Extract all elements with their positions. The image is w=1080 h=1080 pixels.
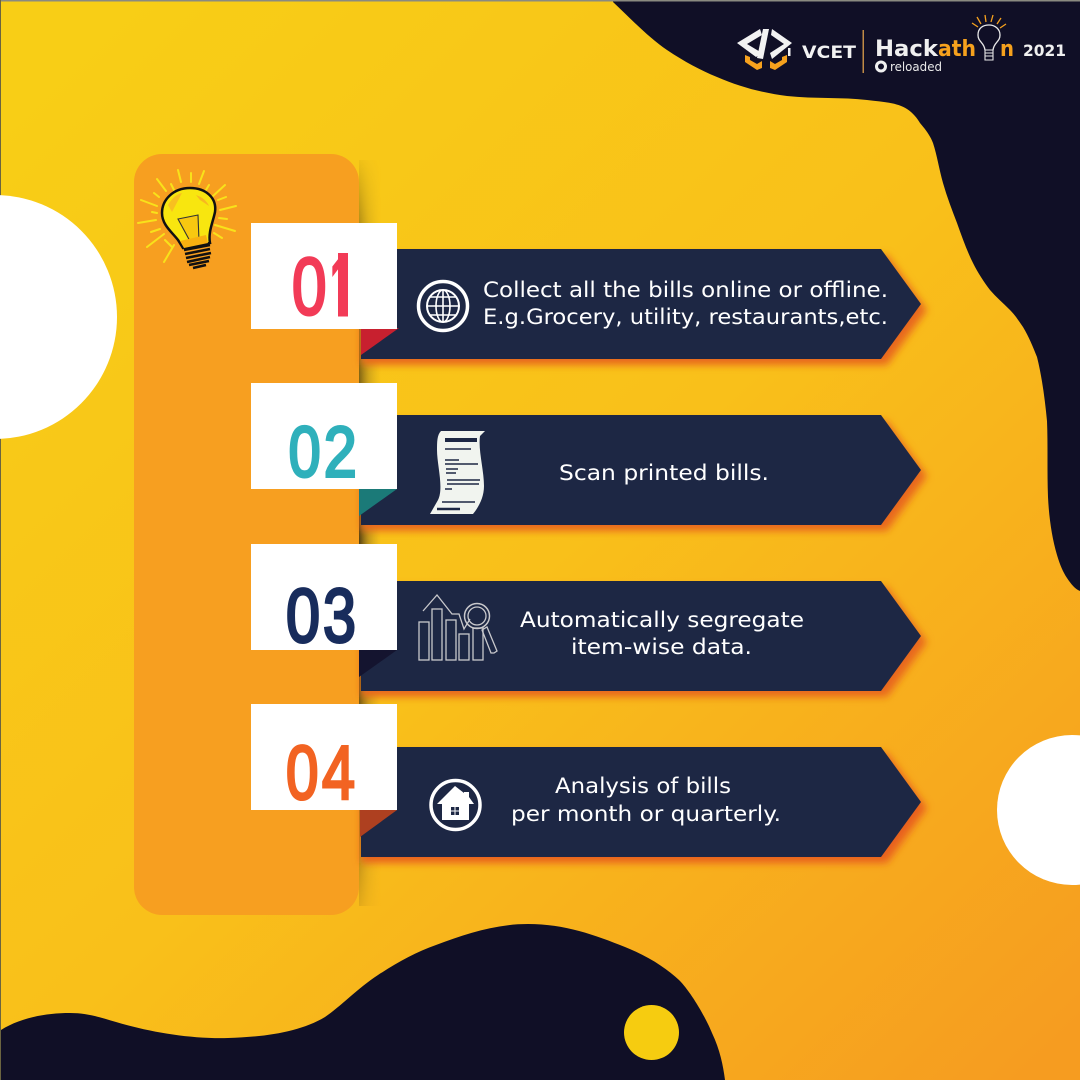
number: 0 xyxy=(292,242,326,332)
header logos xyxy=(737,15,1066,74)
arrow shadow xyxy=(361,255,927,365)
arrow shadow xyxy=(361,421,927,531)
icon: receipt xyxy=(430,431,485,514)
number card xyxy=(251,544,397,650)
description: per month or quarterly. xyxy=(511,802,781,827)
arrow banner xyxy=(361,747,921,857)
step 03 xyxy=(251,544,927,697)
fold triangle xyxy=(359,650,397,677)
description: E.g.Grocery, utility, restaurants,etc. xyxy=(483,305,888,330)
yellow circle xyxy=(624,1005,679,1060)
icon: hackathon bulb xyxy=(972,15,1006,60)
step 04 xyxy=(251,704,927,863)
number: 3 xyxy=(323,574,356,659)
reloaded wordmark: reloaded xyxy=(890,60,942,74)
icon: VCET cap logo xyxy=(737,29,792,70)
step 02 xyxy=(251,383,927,531)
arrow shadow xyxy=(361,753,927,863)
header logos: ath xyxy=(938,37,976,62)
description: Scan printed bills. xyxy=(559,461,769,486)
number: 1 xyxy=(329,242,353,332)
icon: reloaded xyxy=(876,62,886,71)
left white circle xyxy=(0,195,117,439)
fold triangle xyxy=(361,328,399,355)
arrow banner xyxy=(361,249,921,359)
description xyxy=(483,278,888,330)
divider xyxy=(862,30,864,73)
number card xyxy=(251,704,397,810)
orange panel shadow xyxy=(359,160,378,906)
year: 2021 xyxy=(1023,41,1066,60)
number xyxy=(289,412,357,492)
description: Automatically segregate xyxy=(520,608,804,633)
icon: globe xyxy=(418,282,468,330)
step 01 xyxy=(251,223,927,365)
Hackathon wordmark: Hack xyxy=(875,37,939,62)
icon: house xyxy=(431,780,480,830)
right white circle xyxy=(997,735,1080,885)
top right dark blob xyxy=(613,2,1080,591)
number xyxy=(292,242,358,332)
description: item-wise data. xyxy=(571,635,752,660)
number: 0 xyxy=(289,412,321,492)
bottom dark blob xyxy=(1,924,725,1080)
arrow banner xyxy=(361,415,921,525)
description xyxy=(520,608,804,660)
description: Collect all the bills online or offline. xyxy=(483,278,888,303)
arrow banner xyxy=(361,581,921,691)
VCET wordmark: VCET xyxy=(802,43,856,63)
fold triangle xyxy=(359,489,397,516)
icon: chart with magnifier xyxy=(419,595,497,660)
description: Analysis of bills xyxy=(555,774,731,799)
number: 0 xyxy=(286,574,320,659)
number: 0 xyxy=(286,731,318,816)
number xyxy=(286,731,355,816)
description xyxy=(511,774,781,827)
orange panel xyxy=(134,154,359,915)
number card xyxy=(251,383,397,489)
number: 2 xyxy=(324,412,357,492)
number xyxy=(286,574,356,659)
header logos: n xyxy=(1000,37,1014,62)
number card xyxy=(251,223,397,329)
arrow shadow xyxy=(361,587,927,697)
icon: light bulb xyxy=(138,170,236,268)
fold triangle xyxy=(360,810,397,837)
number: 4 xyxy=(322,731,355,816)
